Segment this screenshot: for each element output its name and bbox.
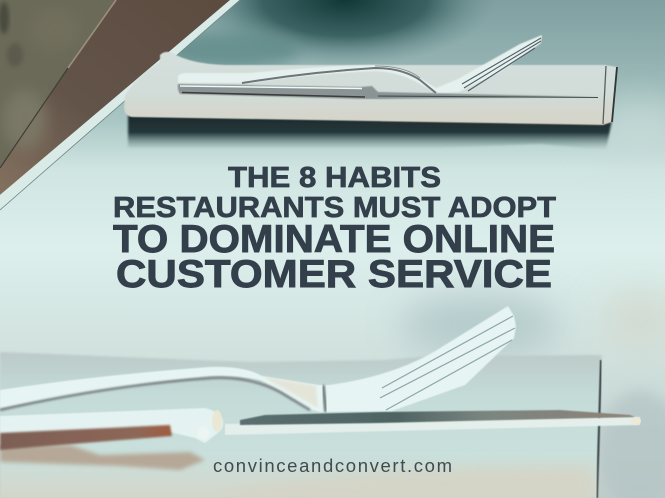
napkin: [124, 52, 617, 125]
concrete wall: [0, 0, 116, 168]
napkin with cutlery, bottom: [0, 306, 641, 498]
knife blade: [225, 410, 641, 435]
table edge: [0, 0, 240, 210]
wood panel: [0, 0, 230, 195]
title line 3: TO DOMINATE ONLINE: [113, 218, 555, 261]
website url: convinceandconvert.com: [213, 455, 452, 476]
napkin fold: [603, 66, 606, 124]
napkin with cutlery, top: [124, 35, 617, 150]
title line 4: CUSTOMER SERVICE: [116, 253, 552, 296]
knife handle: [0, 408, 223, 450]
bottom fork: [0, 306, 516, 412]
title line 1: THE 8 HABITS: [228, 162, 441, 194]
napkin shadow: [128, 115, 612, 150]
title line 2: RESTAURANTS MUST ADOPT: [113, 192, 556, 224]
top knife: [178, 84, 598, 99]
napkin: [0, 352, 602, 498]
top fork: [178, 35, 542, 93]
title: [113, 162, 556, 296]
tan shadow: [0, 445, 205, 470]
